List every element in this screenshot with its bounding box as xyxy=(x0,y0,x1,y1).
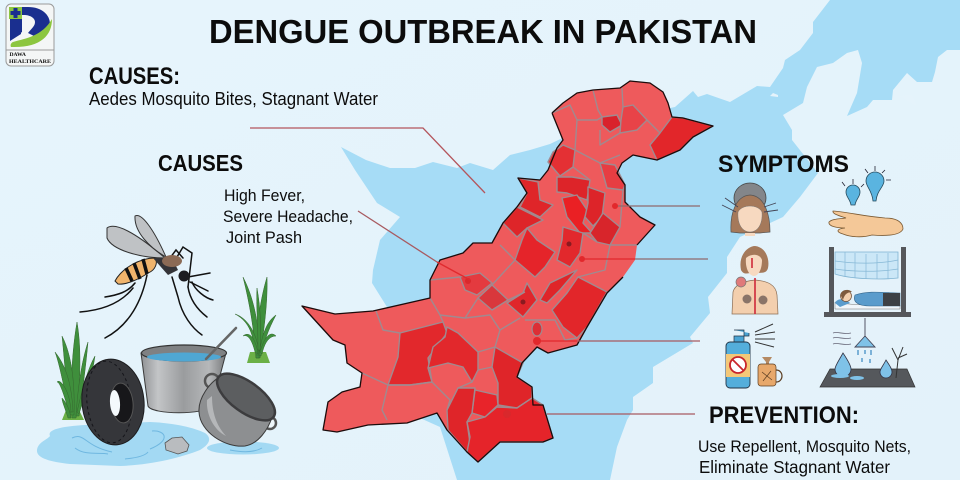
icon: mosquito xyxy=(80,215,213,338)
icon: rock xyxy=(165,437,189,454)
map base xyxy=(302,81,713,462)
symptom list: Joint Pash xyxy=(226,228,302,247)
icon: pot with water xyxy=(141,328,236,413)
icon: bleeding woman xyxy=(732,246,778,314)
title: DENGUE OUTBREAK IN PAKISTAN xyxy=(209,13,757,50)
symptom list: High Fever, xyxy=(224,186,305,205)
logo: Dawa Healthcare: HEALTHCARE xyxy=(9,59,51,65)
icon: tire xyxy=(78,356,148,448)
prevention heading and text: Use Repellent, Mosquito Nets, xyxy=(698,437,911,456)
icon: repellent mug xyxy=(758,357,782,386)
symptom list xyxy=(223,186,353,247)
prevention heading and text: Eliminate Stagnant Water xyxy=(699,457,890,477)
logo: Dawa Healthcare: DAWA xyxy=(10,52,26,58)
icon: hand xyxy=(829,211,903,237)
causes heading and text: Aedes Mosquito Bites, Stagnant Water xyxy=(89,89,378,109)
logo: Dawa Healthcare xyxy=(6,4,54,66)
icon: headache woman xyxy=(722,183,778,236)
prevention heading and text xyxy=(698,402,911,477)
secondary causes heading: CAUSES xyxy=(158,150,243,176)
map of Pakistan xyxy=(302,81,713,462)
icon: green plant left xyxy=(55,322,95,420)
icon: bed with mosquito net xyxy=(824,247,911,317)
mosquito body xyxy=(115,255,190,284)
icon: overturned metal pot xyxy=(199,365,282,446)
prevention heading and text: PREVENTION: xyxy=(709,402,859,429)
callout lines xyxy=(250,128,708,414)
causes heading and text: CAUSES: xyxy=(89,63,180,90)
map districts xyxy=(362,88,713,462)
symptom list: Severe Headache, xyxy=(223,207,353,226)
mosquito legs xyxy=(80,247,213,338)
map accent spots xyxy=(465,242,572,418)
icon: green plant right xyxy=(235,277,276,363)
causes heading and text xyxy=(89,63,378,109)
icon: puddle xyxy=(37,422,279,466)
icon: stagnant water scene xyxy=(820,318,915,387)
water background xyxy=(341,0,960,480)
heading: symptoms: SYMPTOMS xyxy=(718,151,849,178)
icon: repellent spray xyxy=(726,324,775,388)
mosquito wings xyxy=(107,215,166,258)
map outline xyxy=(302,81,713,462)
icon: fever droplets xyxy=(842,166,891,205)
